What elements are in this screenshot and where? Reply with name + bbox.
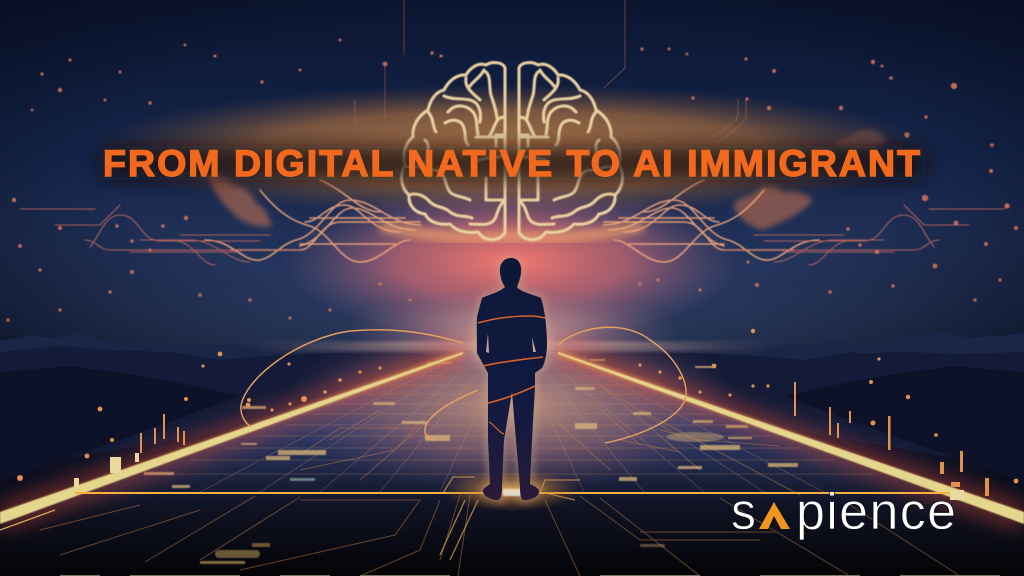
glowing arcs bbox=[241, 327, 686, 443]
orange bands around the figure bbox=[478, 316, 545, 434]
person halo bbox=[477, 258, 547, 500]
circuit waves bbox=[20, 180, 1004, 265]
person silhouette bbox=[477, 258, 547, 500]
horizontal light line bbox=[75, 490, 955, 496]
icon: logo triangle bbox=[759, 502, 790, 529]
left ray glow bbox=[0, 352, 463, 530]
foot glow bbox=[441, 468, 581, 512]
background sky bbox=[0, 0, 1024, 350]
title shadow bbox=[100, 146, 926, 180]
pads on the road bbox=[144, 359, 798, 564]
arm gaps bbox=[486, 333, 536, 353]
sapience logo: pience bbox=[796, 483, 956, 541]
sapience logo: s bbox=[731, 483, 756, 541]
nebula above the figure bbox=[282, 182, 742, 374]
title: FROM DIGITAL NATIVE TO AI IMMIGRANT bbox=[103, 142, 920, 184]
grid on the road bbox=[150, 352, 875, 492]
circuit traces above the brain bbox=[355, 0, 746, 145]
icon: brain bbox=[402, 63, 622, 240]
gold frame lines by the feet bbox=[440, 477, 580, 560]
circuit traces on the road bbox=[40, 385, 960, 576]
right ray glow bbox=[558, 352, 1024, 524]
bottom strip bbox=[60, 574, 1000, 576]
particles in the sky bbox=[6, 38, 1018, 322]
spikes and lights by the rays bbox=[17, 329, 1018, 500]
clouds bbox=[207, 130, 886, 230]
horizon glow bbox=[250, 307, 774, 383]
ground: mountains and side terrain bbox=[0, 332, 1024, 576]
glowing band behind the brain bbox=[87, 84, 937, 216]
road with circuit board surface bbox=[0, 317, 1024, 576]
